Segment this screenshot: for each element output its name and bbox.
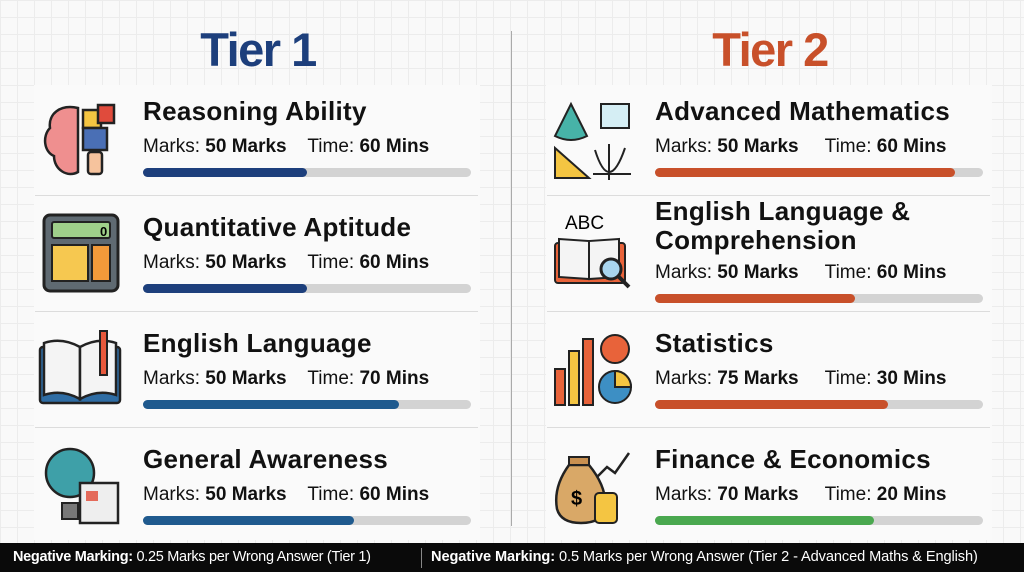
text: title: Quantitative Aptitude [143,212,411,242]
row: Reasoning Ability [44,96,471,177]
bar [143,516,471,525]
icon: ABC book magnifier: ABC [565,213,604,234]
row: Advanced Mathematics [554,96,983,180]
icon: charts [554,334,632,406]
text: marks/time: Marks: 50 Marks Time: 60 Mins [143,484,429,505]
row: General Awareness [44,444,471,525]
text: title: Statistics [655,328,774,358]
text: title: English Language [143,328,372,358]
text: title: English Language & [655,196,910,226]
text: title: Finance & Economics [655,444,931,474]
icon: globe and newspaper [44,448,120,524]
text: title: General Awareness [143,444,388,474]
bar [655,294,983,303]
text: title: Advanced Mathematics [655,96,950,126]
text: title: Comprehension [655,225,857,255]
icon: calculator [42,214,120,292]
icon: money bag and coins: $ [571,488,582,510]
footer: negative marking [0,543,1024,572]
icon: book and pencil [38,330,122,404]
text: title: Reasoning Ability [143,96,367,126]
text: tier 1 negative marking: Negative Marking: 0.25 Marks per Wrong Answer (Tier 1) [13,549,371,565]
title: Tier 2: Tier 2 [712,23,828,76]
icon: brain puzzle [44,104,116,176]
row: English Language & Comprehension [554,196,983,303]
text: marks/time: Marks: 75 Marks Time: 30 Mins [655,368,946,389]
text: tier 2 negative marking: Negative Marking: 0.5 Marks per Wrong Answer (Tier 2 - Advanced Maths & English) [431,549,978,565]
bar [655,168,983,177]
row: English Language [38,328,471,409]
text: marks/time: Marks: 50 Marks Time: 70 Mins [143,368,429,389]
row: Quantitative Aptitude [42,212,471,293]
title: Tier 1: Tier 1 [200,23,316,76]
bar [143,168,471,177]
icon: calculator: 0 [100,224,107,239]
bar [655,516,983,525]
icon: ABC book magnifier [554,213,630,288]
text: marks/time: Marks: 50 Marks Time: 60 Mins [143,252,429,273]
text: marks/time: Marks: 50 Marks Time: 60 Mins [655,136,946,157]
icon: math shapes [554,102,631,180]
bar [143,284,471,293]
text: title [655,196,910,255]
icon: money bag and coins [554,452,630,524]
row: Statistics [554,328,983,409]
row: Finance & Economics [554,444,983,525]
text: marks/time: Marks: 50 Marks Time: 60 Mins [143,136,429,157]
bar [655,400,983,409]
text: marks/time: Marks: 70 Marks Time: 20 Mins [655,484,946,505]
bar [143,400,471,409]
text: marks/time: Marks: 50 Marks Time: 60 Mins [655,262,946,283]
